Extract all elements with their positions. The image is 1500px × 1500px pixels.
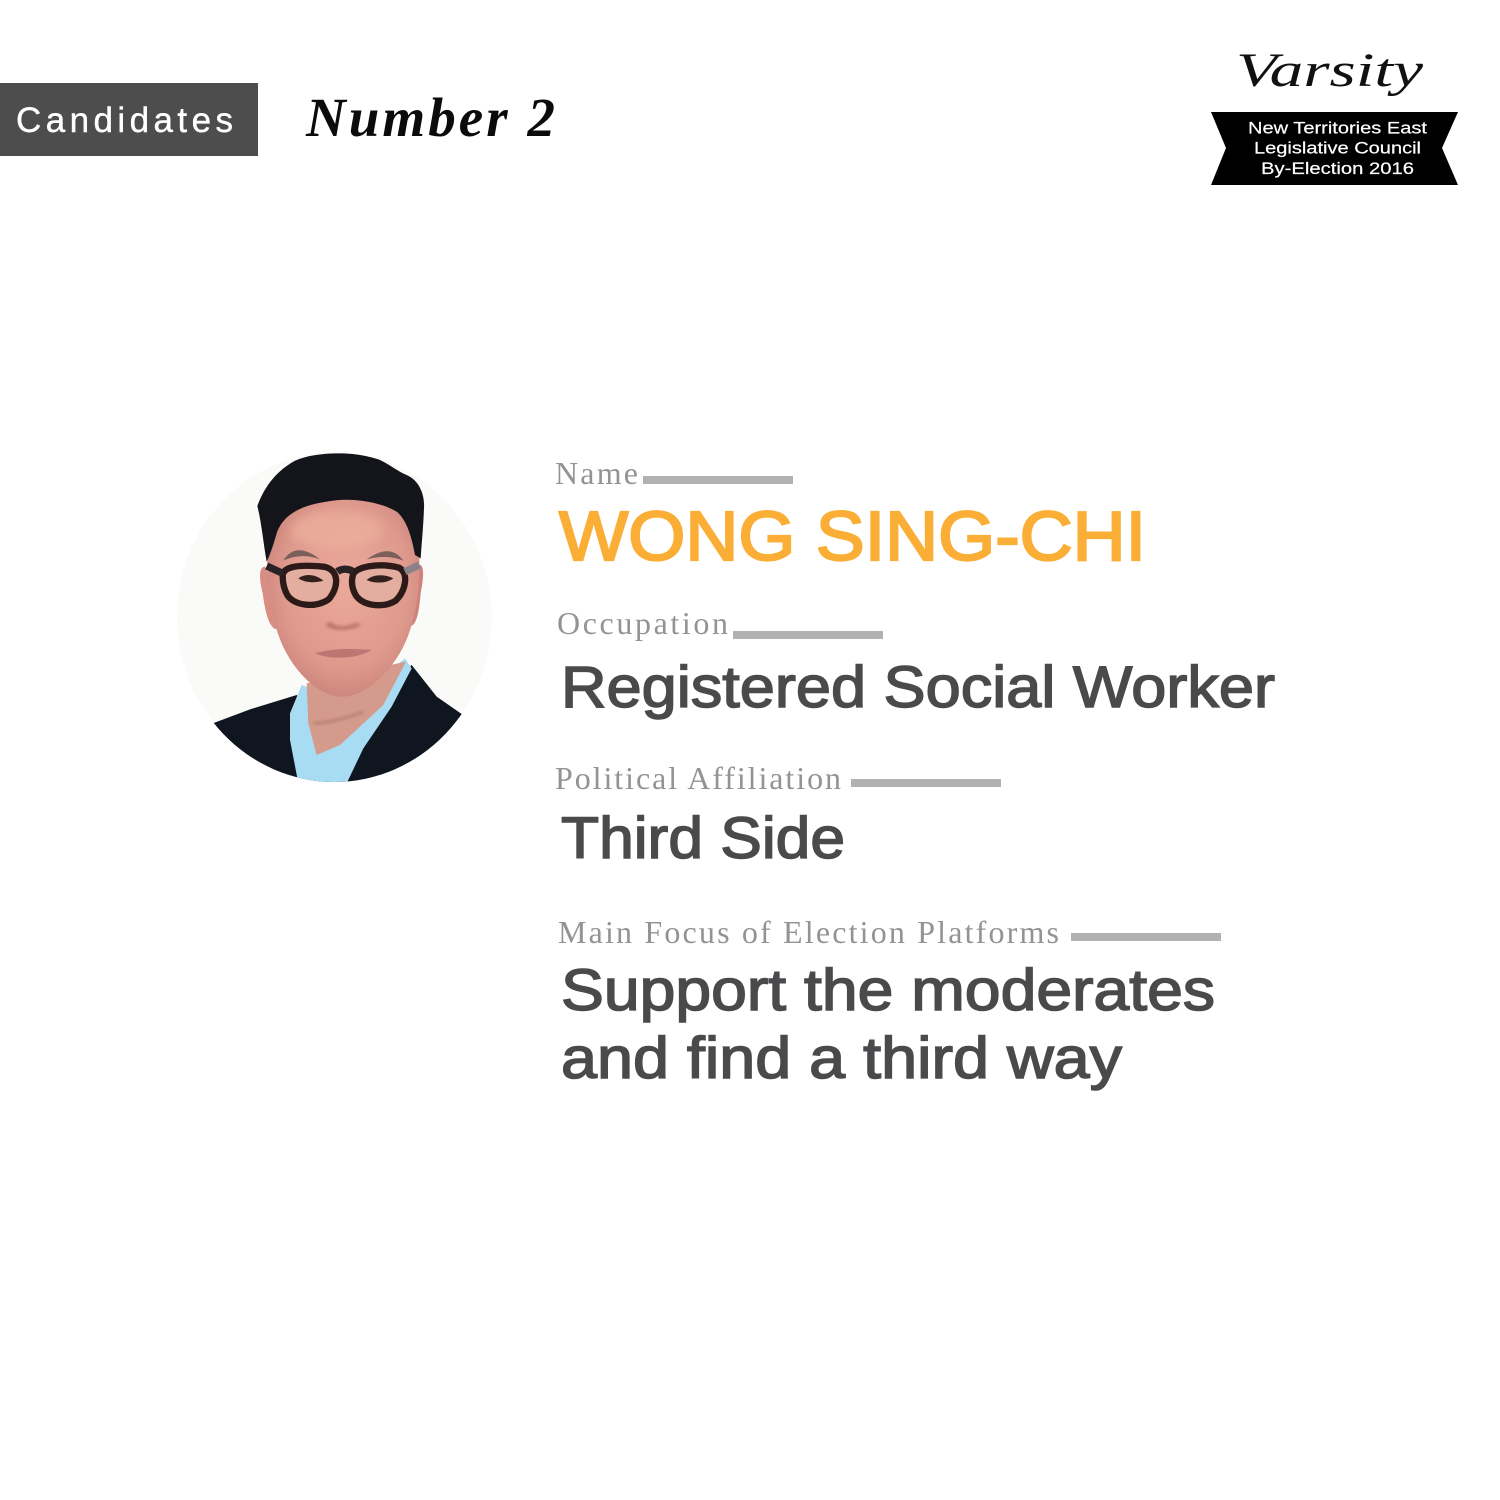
lenses (283, 565, 405, 605)
right ear (411, 564, 424, 626)
portrait photo illustration (214, 453, 462, 782)
forehead highlight (290, 512, 381, 545)
hair (257, 453, 424, 562)
field: Name: Name (555, 455, 638, 491)
header tag: Candidates: Candidates (16, 101, 233, 140)
heading: Number 2: Number 2 (305, 87, 555, 148)
field: Main Focus of Election Platforms (558, 914, 1221, 1091)
field: Political Affiliation: Political Affiliation (555, 760, 841, 796)
eyes (298, 575, 393, 583)
nose shadow (325, 622, 361, 630)
ribbon banner: by-election: By-Election 2016 (1261, 159, 1414, 178)
jacket (214, 665, 462, 782)
field: Name: WONG SING-CHI (559, 497, 1146, 575)
face (267, 495, 419, 697)
field: Main Focus of Election Platforms: Main Focus of Election Platforms (558, 914, 1059, 950)
field: Occupation: Occupation (557, 605, 728, 641)
glasses arm: right (405, 565, 419, 572)
left ear (260, 566, 276, 630)
ribbon banner: by-election (1211, 112, 1458, 185)
eyebrows (283, 550, 403, 561)
field: Main Focus of Election Platforms: Support the moderates (561, 958, 1215, 1023)
field: Political Affiliation (555, 760, 1001, 871)
field: Main Focus of Election Platforms: and find a third way (561, 1026, 1122, 1091)
ribbon banner: by-election: New Territories East (1248, 118, 1427, 138)
neck (307, 662, 406, 755)
neck crease (313, 712, 363, 723)
field: Name (555, 455, 1146, 575)
ribbon banner: by-election: Legislative Council (1254, 138, 1421, 158)
glasses bridge and arms (267, 566, 353, 573)
field: Occupation (557, 605, 1275, 720)
mouth (315, 649, 372, 658)
field: Political Affiliation: Third Side (561, 806, 845, 871)
logo: Varsity wordmark: Varsity (1236, 44, 1424, 97)
field: Occupation: Registered Social Worker (561, 655, 1275, 720)
header tag: Candidates (0, 83, 258, 156)
shirt (290, 658, 412, 783)
